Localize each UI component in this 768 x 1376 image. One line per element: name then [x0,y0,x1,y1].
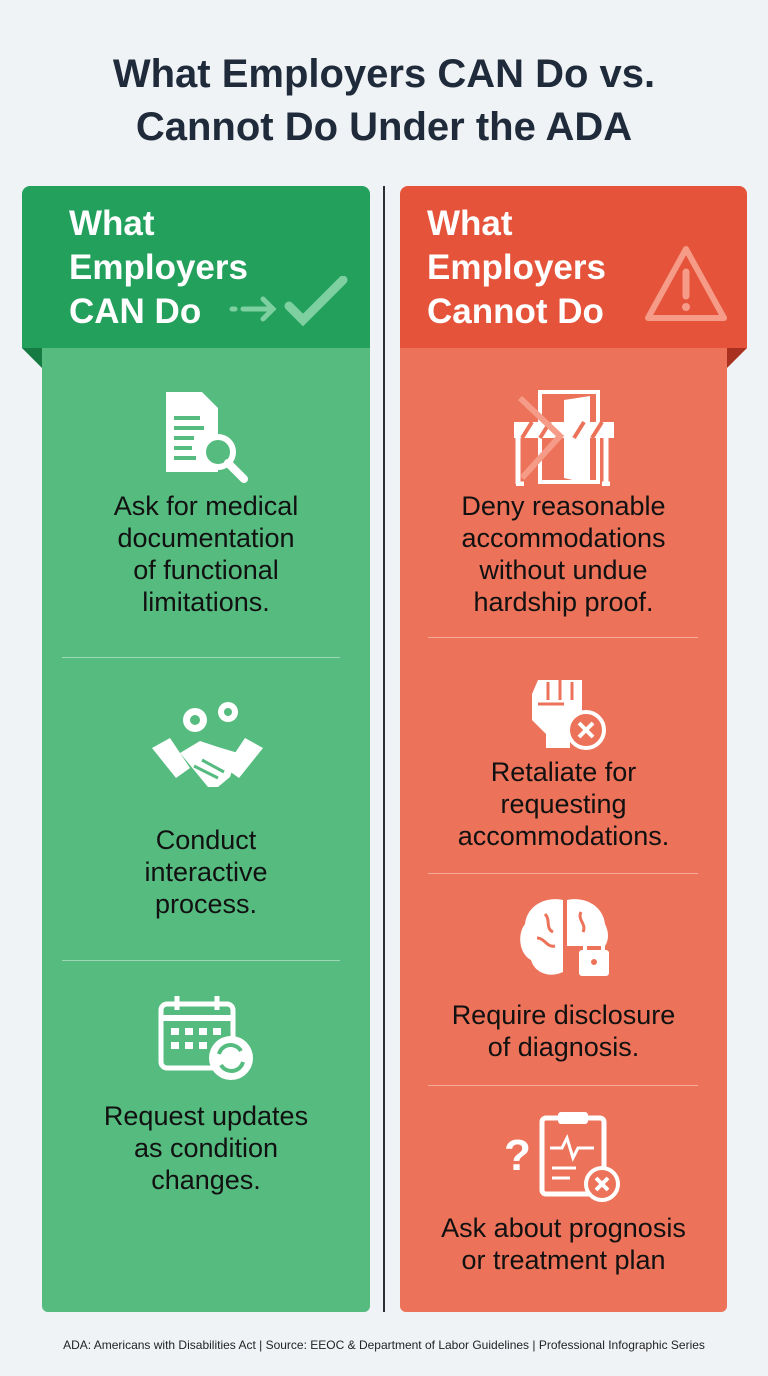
icon: brain lock [520,899,609,976]
text [104,1101,308,1195]
text: of diagnosis. [488,1032,639,1062]
icon: handshake gears [152,702,263,787]
footer: ADA: Americans with Disabilities Act | Source: EEOC & Department of Labor Guidelines | Professional Infographic Series [63,1338,705,1352]
text [144,825,268,919]
text: Request updates [104,1101,308,1131]
title [112,52,655,149]
item 1 [461,390,666,617]
title: Cannot Do Under the ADA [136,105,632,149]
title: What Employers CAN Do vs. [113,52,655,96]
text: Ask for medical [114,491,298,521]
text: accommodations. [458,821,669,851]
item 2 [458,680,669,851]
item 4 [441,1112,686,1275]
item 3 [452,899,675,1062]
icon: document magnifier [166,392,248,483]
fold [727,348,747,368]
text: Retaliate for [491,757,636,787]
header text: CAN Do [69,292,201,331]
text: of functional [133,555,279,585]
header text: What [69,204,155,243]
header text: Employers [69,248,248,287]
icon: clipboard question [504,1112,620,1202]
text [114,491,298,617]
text: process. [155,889,257,919]
item 2 [144,702,268,919]
panel: cannot do [400,186,747,1312]
text: changes. [151,1165,261,1195]
icon: clipboard question: ? [504,1131,531,1180]
item 3 [104,996,308,1195]
header text: Cannot Do [427,292,604,331]
text: Ask about prognosis [441,1213,686,1243]
header text: Employers [427,248,606,287]
text: accommodations [461,523,666,553]
icon: fist with x [532,680,606,750]
text: requesting [500,789,627,819]
text: as condition [134,1133,278,1163]
panel: can do [22,186,370,1312]
text [461,491,666,617]
text [441,1213,686,1275]
text: without undue [479,555,648,585]
text: hardship proof. [473,587,654,617]
text: Deny reasonable [461,491,666,521]
icon: arrow and check [230,276,348,326]
text [458,757,669,851]
header text [69,204,248,331]
text: or treatment plan [461,1245,666,1275]
header text [427,204,606,331]
icon: calendar refresh [158,996,253,1080]
red header [400,186,747,348]
text: Require disclosure [452,1000,675,1030]
text: limitations. [142,587,270,617]
item 1 [114,392,298,617]
text [452,1000,675,1062]
green body [42,348,370,1312]
icon: barrier door [514,390,614,486]
fold [22,348,42,368]
center divider [383,186,385,1312]
text: interactive [144,857,268,887]
green header [22,186,370,348]
text: documentation [117,523,295,553]
red body [400,348,727,1312]
header text: What [427,204,513,243]
text: Conduct [156,825,256,855]
icon: warning [645,246,727,321]
